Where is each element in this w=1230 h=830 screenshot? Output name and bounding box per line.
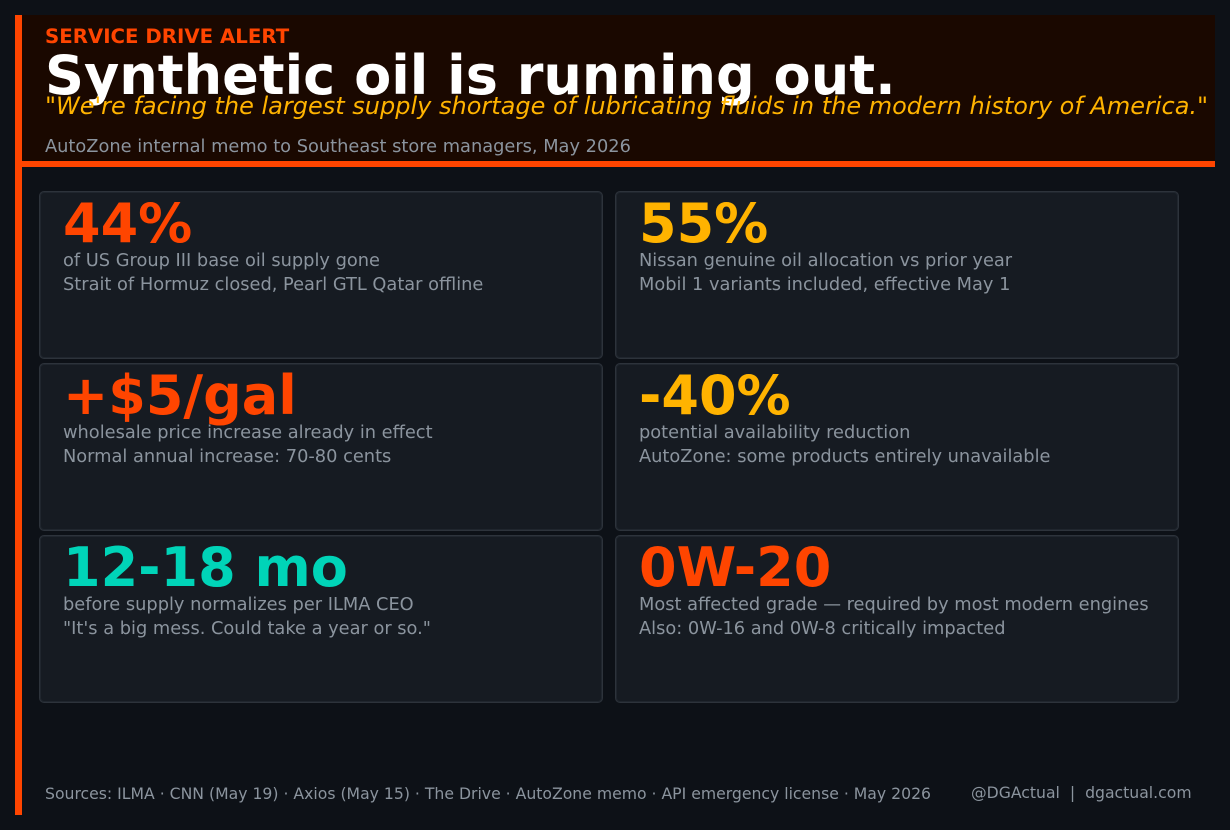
description line 1: before supply normalizes per ILMA CEO	[63, 594, 414, 615]
description line 2: Mobil 1 variants included, effective May 1	[639, 274, 1010, 295]
memo attribution: AutoZone internal memo to Southeast store managers, May 2026	[45, 136, 631, 157]
description line 2: Strait of Hormuz closed, Pearl GTL Qatar offline	[63, 274, 483, 295]
description line 2: Normal annual increase: 70-80 cents	[63, 446, 391, 467]
stat: 0W-20: 0W-20	[639, 536, 831, 599]
stat: -40%: -40%	[639, 364, 791, 427]
sources footer: Sources: ILMA · CNN (May 19) · Axios (May 15) · The Drive · AutoZone memo · API emergency license · May 2026	[45, 784, 931, 803]
description line 1: wholesale price increase already in effect	[63, 422, 433, 443]
stat: +$5/gal: +$5/gal	[63, 364, 297, 427]
panel: 55%	[615, 191, 1179, 359]
panel: 0W-20	[615, 535, 1179, 703]
description line 1: Most affected grade — required by most modern engines	[639, 594, 1149, 615]
description line 1: potential availability reduction	[639, 422, 910, 443]
header rule	[15, 161, 1215, 167]
quote: "We're facing the largest supply shortage of lubricating fluids in the modern history of America."	[45, 92, 1208, 120]
handle and site: @DGActual | dgactual.com	[971, 783, 1192, 802]
panel: 44%	[39, 191, 603, 359]
panel: 12-18 mo	[39, 535, 603, 703]
description line 2: "It's a big mess. Could take a year or so."	[63, 618, 431, 639]
left accent bar	[15, 15, 22, 815]
kicker: SERVICE DRIVE ALERT	[45, 25, 289, 48]
stat: 55%: 55%	[639, 192, 768, 255]
description line 2: AutoZone: some products entirely unavailable	[639, 446, 1050, 467]
panel: -40%	[615, 363, 1179, 531]
title: Synthetic oil is running out.	[45, 44, 896, 107]
description line 2: Also: 0W-16 and 0W-8 critically impacted	[639, 618, 1006, 639]
description line 1: Nissan genuine oil allocation vs prior year	[639, 250, 1012, 271]
header panel	[15, 15, 1215, 161]
panel: +$5/gal	[39, 363, 603, 531]
stat: 12-18 mo: 12-18 mo	[63, 536, 348, 599]
description line 1: of US Group III base oil supply gone	[63, 250, 380, 271]
stat: 44%: 44%	[63, 192, 192, 255]
